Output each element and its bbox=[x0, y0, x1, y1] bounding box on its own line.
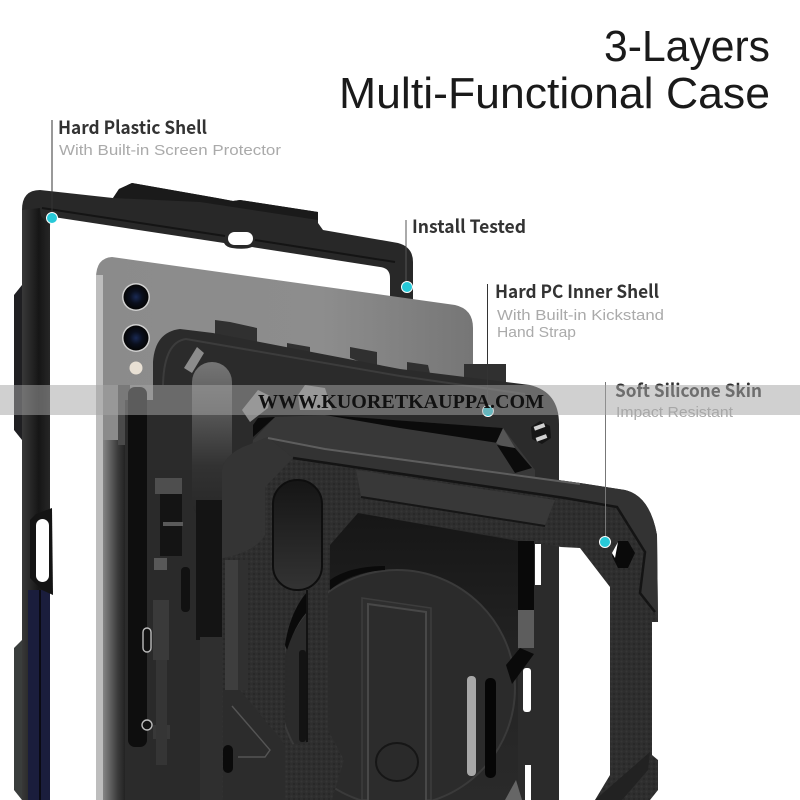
disc slot light bbox=[467, 676, 476, 776]
marker: install bbox=[402, 282, 412, 292]
layer: soft silicone skin bbox=[222, 437, 658, 800]
label: soft silicone skin: Impact Resistant bbox=[616, 404, 734, 421]
leader line: hard PC inner shell bbox=[486, 284, 488, 411]
lower shell surface bbox=[250, 415, 535, 500]
title: Multi-Functional Case bbox=[339, 69, 770, 118]
watermark band: WWW.KUORETKAUPPA.COM bbox=[258, 392, 544, 413]
shell left oval cutout bbox=[192, 362, 232, 522]
hex hole in skin corner bbox=[612, 541, 635, 568]
label: hard plastic shell bbox=[58, 114, 281, 159]
left side stripe bbox=[225, 560, 238, 690]
icon: screw bbox=[531, 421, 551, 444]
glossy top rim bbox=[268, 437, 658, 622]
disc slot dark bbox=[485, 678, 496, 778]
oval cutout in skin bbox=[273, 480, 322, 590]
label: hard plastic shell: With Built-in Screen Protector bbox=[59, 142, 281, 159]
smooth strip on top band bbox=[356, 470, 555, 525]
label: hard PC inner shell: With Built-in Kickstand bbox=[497, 307, 664, 324]
label: hard PC inner shell: Hard PC Inner Shell bbox=[495, 278, 659, 304]
label: hard PC inner shell bbox=[495, 278, 664, 341]
label: hard PC inner shell: Hand Strap bbox=[497, 324, 576, 341]
center bar bbox=[288, 585, 344, 800]
skin frame base bbox=[222, 437, 658, 800]
marker: skin bbox=[600, 536, 610, 548]
icon: rear camera lower bbox=[122, 324, 150, 352]
icon: camera flash bbox=[130, 362, 142, 374]
marker: shell bbox=[46, 212, 58, 224]
leader line: install tested bbox=[405, 220, 407, 287]
black slot band bbox=[325, 415, 503, 443]
pen slot bbox=[128, 387, 147, 747]
title bbox=[339, 22, 770, 118]
right lower chevrons bbox=[595, 752, 650, 800]
glossy left shoulder bbox=[222, 437, 293, 558]
title: 3-Layers bbox=[604, 22, 770, 71]
label: soft silicone skin bbox=[615, 377, 762, 421]
ports bbox=[143, 628, 151, 652]
layer: tablet bbox=[96, 257, 473, 800]
leader line: soft silicone skin bbox=[604, 382, 606, 542]
layer: hard plastic shell bbox=[14, 183, 413, 800]
layer: hard PC inner shell bbox=[125, 320, 559, 800]
hand strap and right inner cutouts bbox=[505, 541, 541, 800]
rotating disc bbox=[279, 570, 515, 800]
lower-left piece bbox=[223, 690, 285, 800]
kickstand bbox=[362, 598, 431, 800]
dark crescent bbox=[285, 566, 385, 650]
label: soft silicone skin: Soft Silicone Skin bbox=[615, 377, 762, 403]
icon: rear camera upper bbox=[122, 283, 150, 311]
label: install tested: Install Tested bbox=[412, 213, 526, 239]
back plate bbox=[328, 513, 518, 800]
watermark band bbox=[0, 385, 800, 415]
label: hard plastic shell: Hard Plastic Shell bbox=[58, 114, 207, 140]
marker: inner shell bbox=[482, 406, 494, 416]
leader line: hard plastic shell bbox=[51, 120, 53, 218]
